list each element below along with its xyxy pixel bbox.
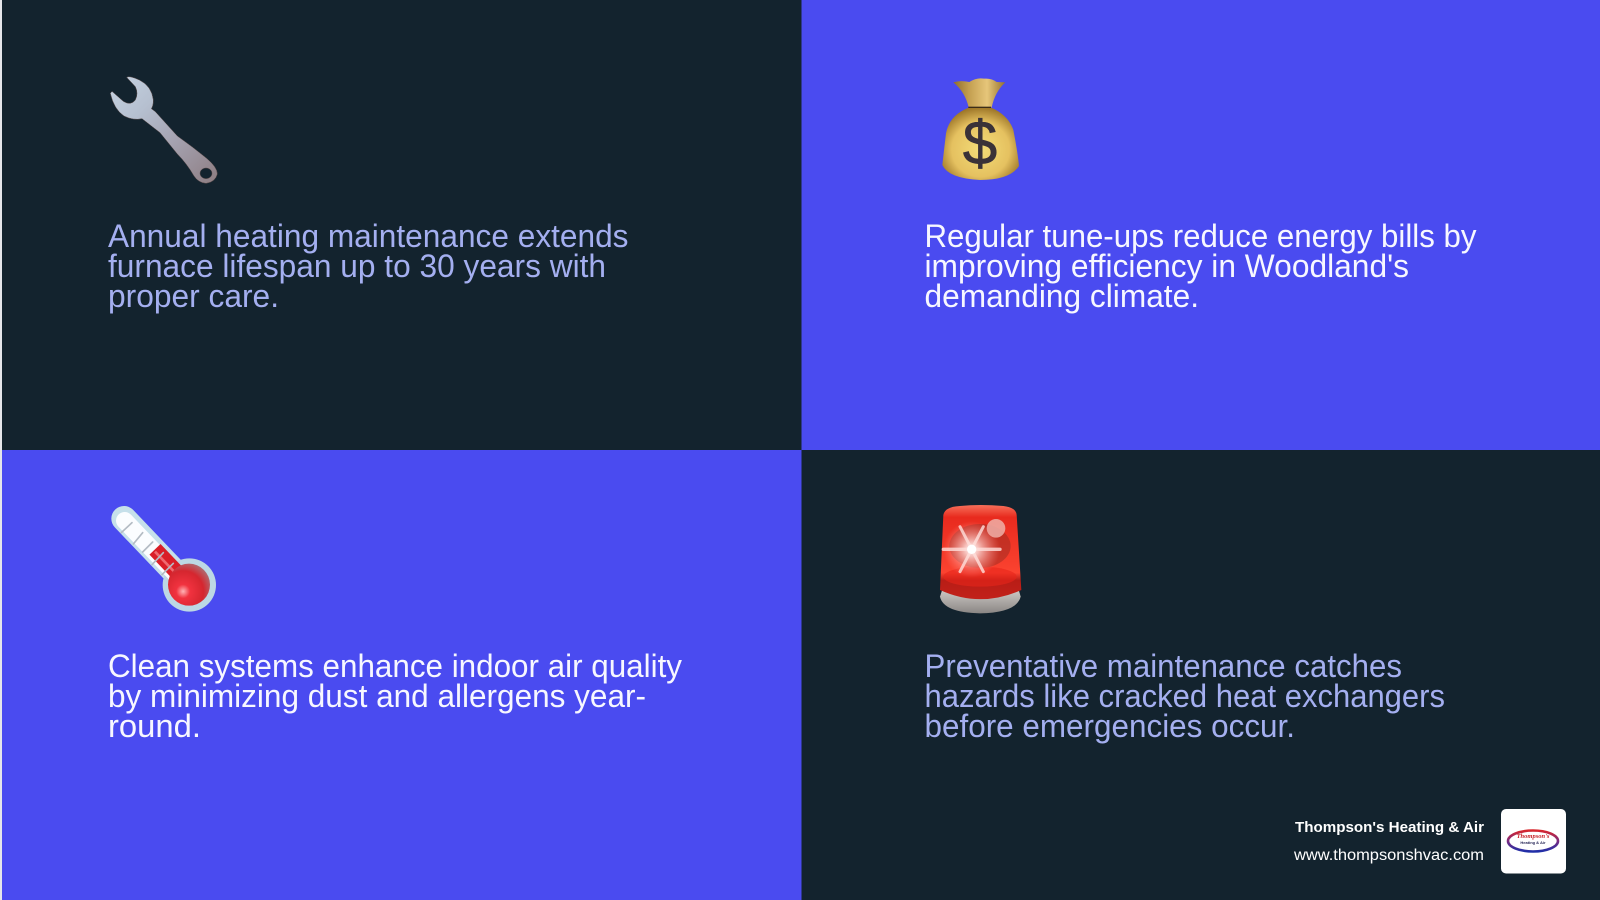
text: furnace lifespan: furnace lifespan up to 30 years with: [108, 248, 606, 284]
brand name: Thompson's Heating & Air: [1295, 819, 1484, 836]
text: safety hazards: before emergencies occur.: [924, 708, 1295, 744]
brand footer: [1293, 809, 1566, 874]
text: furnace lifespan: Annual heating maintenance extends: [108, 218, 628, 254]
panel: furnace lifespan: [2, 0, 802, 450]
panel: air quality: [2, 450, 802, 900]
text: furnace lifespan: [108, 218, 628, 314]
icon: money bag: $: [963, 109, 997, 178]
icon: emergency beacon: [940, 505, 1021, 613]
text: air quality: Clean systems enhance indoor air quality: [108, 648, 682, 684]
panel: energy bills: [802, 0, 1600, 450]
panel: safety hazards: [802, 450, 1600, 900]
icon: wrench: [110, 77, 217, 183]
text: air quality: round.: [108, 708, 201, 744]
logo: [1501, 809, 1566, 874]
text: safety hazards: hazards like cracked heat exchangers: [924, 678, 1445, 714]
text: furnace lifespan: proper care.: [108, 278, 279, 314]
logo: Thompson's: [1517, 833, 1550, 840]
text: air quality: [108, 648, 682, 744]
icon: thermometer: [121, 519, 216, 612]
text: safety hazards: [924, 648, 1445, 744]
logo: Heating & Air: [1520, 840, 1546, 845]
text: air quality: by minimizing dust and allergens year-: [108, 678, 646, 714]
text: energy bills: demanding climate.: [924, 278, 1199, 314]
text: energy bills: [924, 218, 1476, 314]
icon: money bag: [942, 78, 1019, 180]
text: energy bills: improving efficiency in Woodland's: [924, 248, 1409, 284]
website: www.thompsonshvac.com: [1293, 847, 1484, 864]
text: energy bills: Regular tune-ups reduce energy bills by: [924, 218, 1476, 254]
text: safety hazards: Preventative maintenance catches: [924, 648, 1402, 684]
